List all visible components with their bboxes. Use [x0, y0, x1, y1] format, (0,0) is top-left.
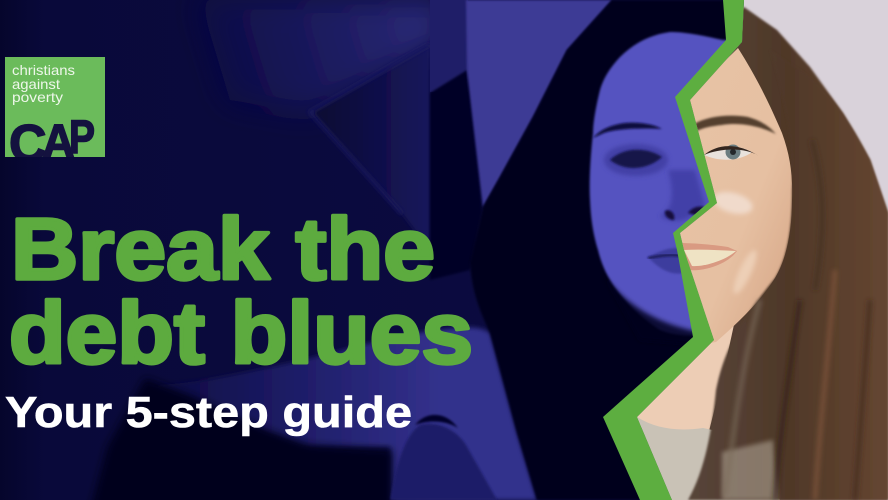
blue face: eye socket shadow — [604, 144, 668, 176]
logo CAP letters: P — [69, 110, 95, 163]
CAP logo — [5, 57, 105, 157]
blue face: eye — [610, 150, 662, 168]
blue face: eyebrow — [593, 123, 662, 138]
title — [9, 201, 473, 382]
jumper seen through hair — [722, 440, 778, 500]
neck — [637, 306, 734, 430]
subtitle: Your 5-step guide — [5, 388, 412, 437]
cheek highlight — [714, 190, 754, 216]
brown hair back — [680, 7, 888, 500]
blue face: chin shadow — [604, 275, 705, 345]
title: Break the — [11, 201, 435, 298]
logo wordmark: christians — [12, 62, 75, 78]
colour half of portrait — [625, 0, 888, 500]
face skin — [670, 48, 792, 345]
green jagged split line — [603, 0, 744, 500]
blue face: mouth line — [648, 255, 682, 258]
blue fleece jumper — [90, 327, 537, 500]
fleece arm — [390, 424, 497, 500]
blue face: nostrils — [665, 207, 705, 220]
logo CAP letters: A — [42, 116, 75, 169]
blue face — [590, 32, 735, 345]
dark hair, blue side — [470, 0, 735, 500]
light lilac wall — [630, 0, 888, 500]
blue face: lips — [648, 248, 684, 274]
logo CAP letters: C — [9, 115, 47, 173]
logo wordmark: poverty — [12, 89, 63, 105]
teeth and smile — [680, 243, 737, 270]
jumper — [637, 417, 780, 500]
logo CAP letters — [10, 120, 94, 157]
jaw highlight — [733, 250, 758, 294]
front hair strands — [688, 50, 888, 500]
fleece crease — [415, 415, 458, 428]
dark shape below the fleece — [90, 378, 392, 500]
logo square — [5, 57, 105, 157]
title: debt blues — [9, 285, 473, 382]
eye — [704, 144, 759, 160]
blue face: nose shadow — [660, 170, 705, 221]
eyebrow — [694, 116, 776, 134]
logo wordmark: against — [12, 76, 60, 92]
hair highlights — [725, 140, 870, 500]
